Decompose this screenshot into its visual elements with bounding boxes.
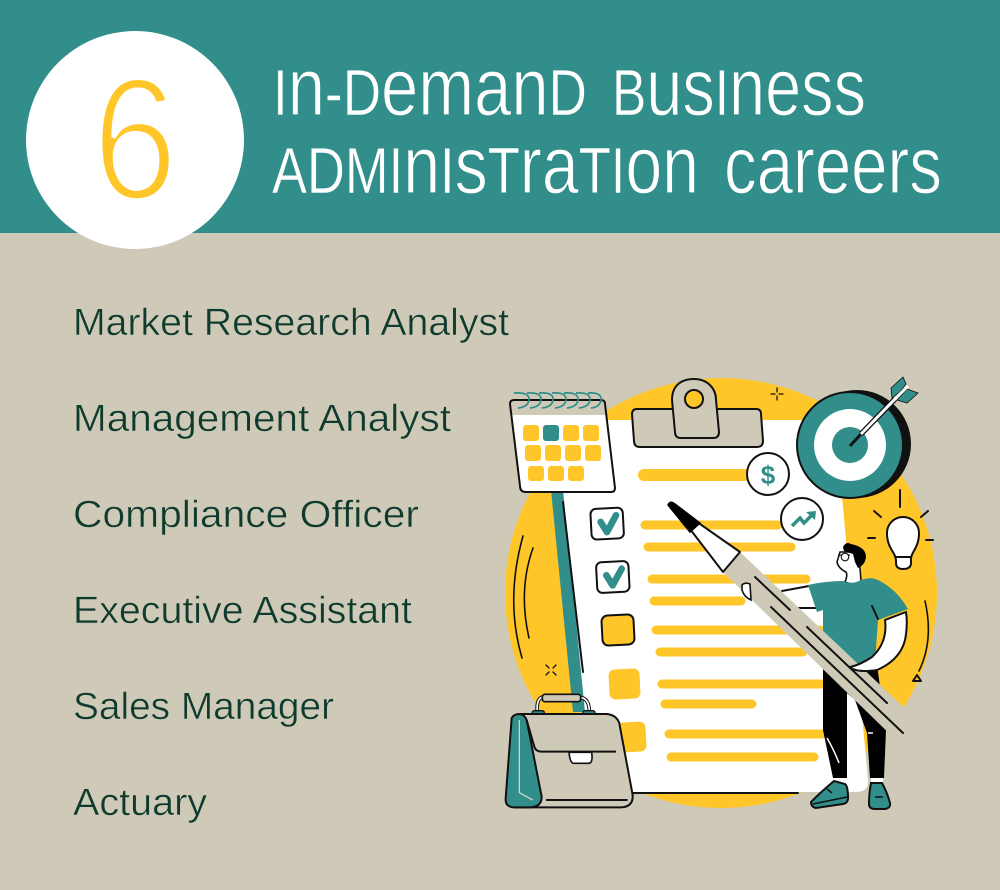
neck and head	[837, 543, 866, 584]
target	[797, 377, 918, 498]
leg highlights	[827, 733, 873, 763]
yellow backdrop	[505, 378, 937, 808]
calendar	[510, 393, 615, 492]
clipboard edge	[551, 490, 798, 793]
checkbox 4	[608, 668, 641, 700]
growth icon	[781, 498, 823, 540]
checkbox 2	[596, 561, 630, 593]
career list	[73, 302, 509, 824]
briefcase handle	[532, 694, 595, 715]
dart	[850, 377, 918, 446]
legs	[823, 665, 886, 778]
calendar rings	[514, 393, 601, 408]
number badge: 6	[92, 42, 178, 236]
title	[272, 42, 942, 211]
briefcase flap	[569, 752, 592, 763]
checkbox 5	[617, 721, 647, 753]
calendar cells	[523, 425, 601, 481]
career list: Actuary	[73, 782, 207, 824]
socks	[834, 778, 883, 785]
light bulb	[868, 490, 933, 569]
raised arm	[850, 612, 907, 671]
header band	[0, 0, 1000, 233]
briefcase	[506, 694, 633, 807]
career list: Executive Assistant	[73, 590, 412, 632]
career list: Compliance Officer	[73, 494, 419, 536]
pencil	[668, 502, 915, 742]
decorative sparkles	[546, 388, 783, 675]
illustration	[505, 377, 937, 809]
title: BusIness	[612, 42, 866, 133]
briefcase side	[506, 714, 542, 807]
t-shirt	[808, 578, 908, 668]
title: In-DemanD	[273, 42, 587, 133]
title: careers	[724, 120, 942, 211]
person	[782, 543, 908, 809]
checklist lines	[644, 475, 822, 757]
briefcase body	[513, 714, 633, 807]
shoes	[811, 781, 890, 809]
title: ADMInIsTraTIon	[272, 120, 699, 211]
career list: Management Analyst	[73, 398, 451, 440]
number badge	[26, 31, 244, 249]
motion lines	[514, 536, 928, 681]
checkbox 3	[601, 614, 635, 646]
dollar icon: $	[761, 460, 776, 490]
career list: Market Research Analyst	[73, 302, 509, 344]
arm and pointer line	[782, 586, 817, 608]
checkbox 1	[590, 507, 624, 540]
career list: Sales Manager	[73, 686, 334, 728]
dollar icon	[747, 453, 789, 495]
clipboard sheet	[553, 420, 868, 792]
clipboard clip	[632, 379, 763, 447]
